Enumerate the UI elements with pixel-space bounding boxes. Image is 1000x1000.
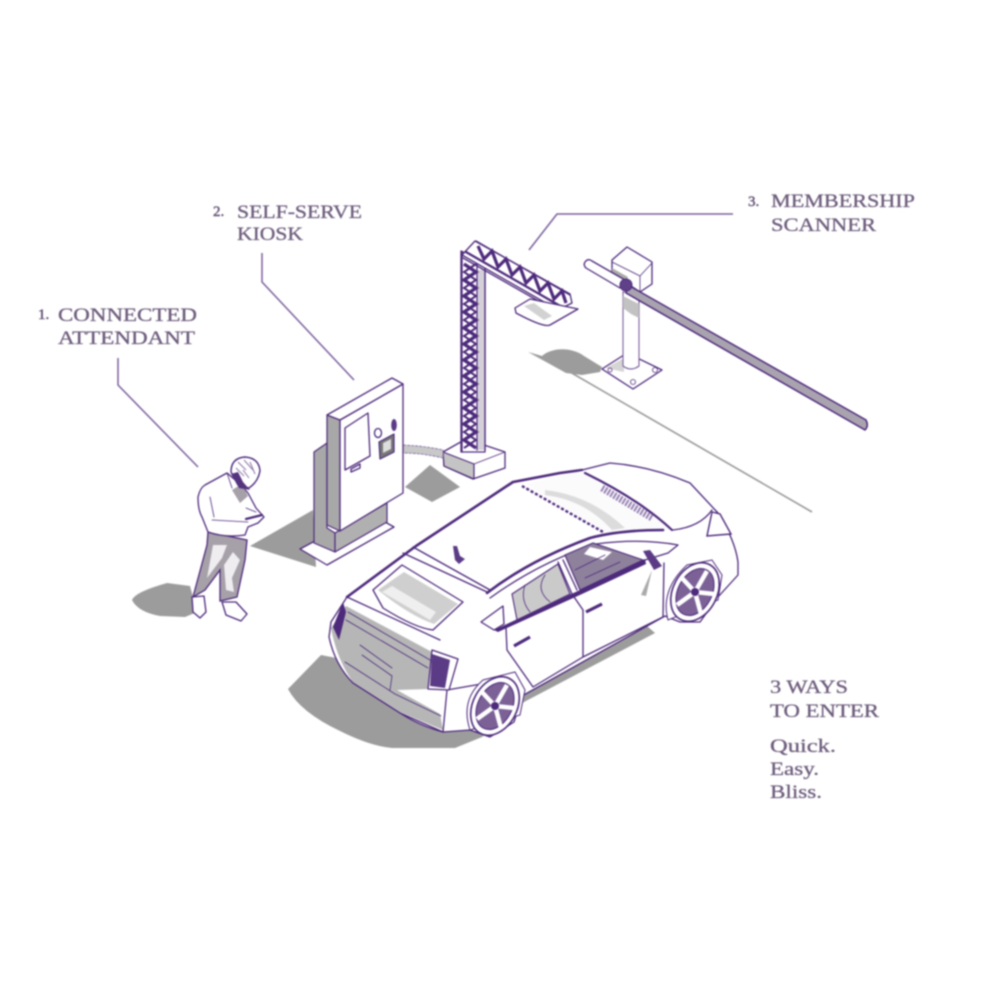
overhead camera panel	[515, 299, 578, 326]
side roof arc	[487, 530, 663, 593]
rear bumper shading	[331, 606, 443, 730]
cabinet side	[327, 415, 340, 531]
rear fascia lines	[345, 612, 441, 716]
ground shadow near gantry	[405, 465, 460, 502]
car body	[329, 463, 738, 737]
caption tagline: Quick.	[770, 736, 836, 757]
attendant figure	[132, 457, 264, 621]
headlight	[707, 512, 731, 536]
leader line: attendant	[118, 358, 198, 467]
label 1: connected attendant: ATTENDANT	[58, 328, 195, 349]
gantry truss	[443, 241, 578, 479]
label 1: connected attendant: 1.	[38, 307, 49, 323]
hood line	[673, 510, 712, 530]
buttons	[374, 428, 382, 438]
barrier shadow	[528, 349, 602, 375]
label 3: membership scanner	[748, 191, 915, 236]
label 2: self-serve kiosk	[213, 202, 362, 245]
post	[623, 292, 639, 369]
caption tagline: Bliss.	[770, 782, 822, 803]
rear window	[373, 565, 463, 630]
door handles	[514, 604, 602, 646]
leader line: scanner	[529, 214, 733, 250]
caption heading: TO ENTER	[770, 701, 879, 722]
self-serve kiosk	[250, 378, 403, 567]
trousers	[193, 532, 247, 601]
windshield	[525, 471, 674, 532]
base plate	[300, 522, 394, 565]
road marking line	[570, 372, 812, 512]
car shadow	[288, 620, 655, 748]
quarter window	[481, 606, 504, 630]
window sill	[494, 559, 646, 632]
beam	[462, 241, 572, 310]
barrier gate	[528, 247, 867, 430]
label 2: self-serve kiosk: SELF-SERVE	[237, 202, 362, 223]
screen	[345, 413, 370, 470]
column	[461, 251, 485, 452]
label 1: connected attendant	[38, 305, 197, 349]
side mirror	[643, 550, 662, 570]
kiosk shadow	[250, 510, 316, 567]
cable strip	[403, 445, 443, 458]
car	[288, 463, 738, 748]
roof outline	[347, 470, 582, 597]
left tail light	[333, 602, 346, 640]
cabinet top	[327, 378, 403, 420]
caption tagline	[770, 736, 836, 803]
label 2: self-serve kiosk: 2.	[213, 204, 224, 220]
card reader	[379, 434, 394, 459]
shoes	[192, 596, 206, 618]
label 2: self-serve kiosk: KIOSK	[237, 224, 303, 245]
caption tagline: Easy.	[770, 759, 819, 780]
pillar	[558, 560, 577, 594]
right tail light	[428, 650, 458, 690]
caption heading: 3 WAYS	[770, 677, 848, 698]
figure shadow	[132, 583, 197, 617]
caption heading	[770, 677, 879, 722]
shark-fin antenna	[453, 546, 465, 564]
rear wheel	[461, 668, 529, 744]
leader line: kiosk	[262, 253, 354, 380]
concrete footing	[443, 439, 505, 479]
label 3: membership scanner: 3.	[748, 194, 759, 210]
cabinet front	[340, 384, 403, 531]
label 3: membership scanner: MEMBERSHIP	[771, 191, 915, 212]
label 3: membership scanner: SCANNER	[771, 215, 876, 236]
hands with device	[246, 515, 262, 519]
counterweight arm	[584, 260, 625, 288]
door seams	[506, 563, 664, 687]
rear pillar	[314, 443, 335, 552]
scanner box	[612, 247, 652, 292]
label 1: connected attendant: CONNECTED	[58, 305, 197, 326]
shirt and arms	[198, 473, 264, 536]
front wheel	[661, 554, 729, 630]
rear door window	[512, 564, 570, 620]
head	[231, 457, 260, 488]
long barrier arm	[626, 285, 867, 430]
front door window	[565, 543, 643, 590]
base plate	[602, 353, 662, 389]
